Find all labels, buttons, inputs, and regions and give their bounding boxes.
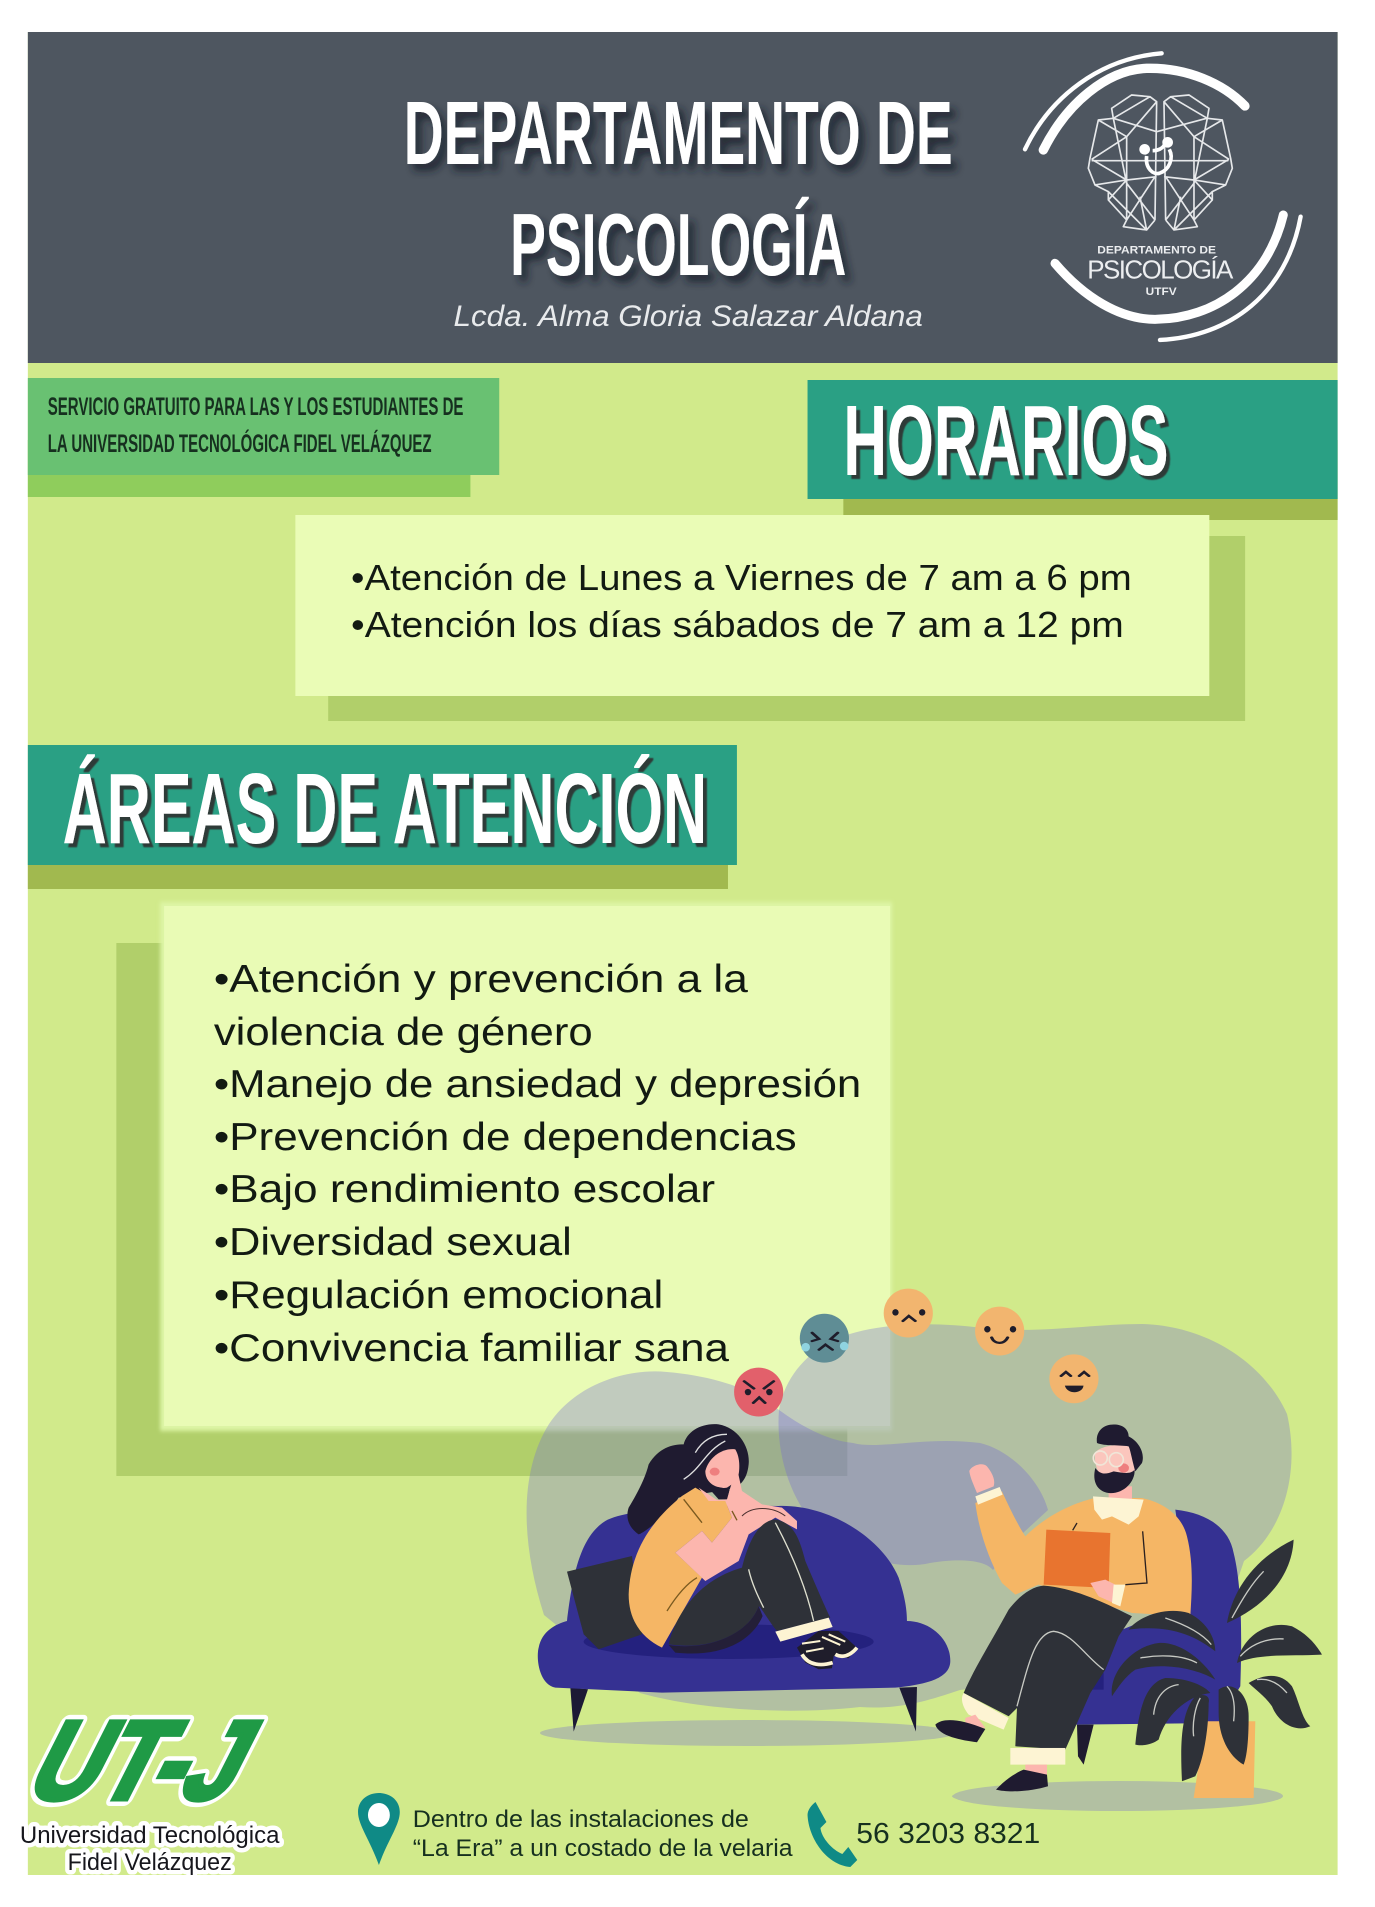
panel: attention areas box: •Manejo de ansiedad y depresión [214,1063,861,1106]
address text: “La Era” a un costado de la velaria [413,1835,793,1862]
panel: attention areas box: •Atención y prevención a la [214,958,748,1001]
logo: Departamento de Psicología: UTFV [1146,286,1178,298]
subtitle: name: Lcda. Alma Gloria Salazar Aldana [453,300,923,333]
logo: university: Fidel Velázquez [68,1849,232,1876]
potted plant leaves [1112,1540,1322,1781]
title [404,84,953,294]
background blob [527,1324,1292,1711]
illustration: therapy session [527,1289,1322,1811]
logo: university: UT-J [9,1699,279,1824]
logo: university: UT-J [9,1699,279,1824]
logo: Departamento de Psicología [1025,53,1301,340]
panel: schedule box: •Atención los días sábados de 7 am a 12 pm [351,605,1124,645]
address text: Dentro de las instalaciones de [413,1806,749,1833]
panel: free service notice: LA UNIVERSIDAD TECNOLÓGICA FIDEL VELÁZQUEZ [48,428,432,458]
logo: Departamento de Psicología: PSICOLOGÍA [1087,254,1234,284]
man on sofa [935,1424,1322,1807]
panel: attention areas box: •Bajo rendimiento escolar [214,1168,715,1211]
panel: attention areas box [116,902,892,1476]
woman on sofa [538,1424,950,1732]
heading: Áreas de atención [28,745,737,889]
title: PSICOLOGÍA [510,196,846,294]
logo: university: Universidad Tecnológica [20,1822,280,1849]
panel: attention areas box: •Prevención de dependencias [214,1116,797,1159]
floor shadows [540,1720,956,1746]
address text [413,1806,793,1862]
phone number: 56 3203 8321 [856,1818,1040,1850]
icon: phone [808,1802,857,1867]
emotion faces [734,1289,1099,1416]
heading: Horarios: HORARIOS [843,386,1169,497]
overlapping purple blob [778,1410,1048,1570]
title: DEPARTAMENTO DE [404,84,953,184]
panel: header band [28,32,1338,363]
panel: attention areas box: •Regulación emocional [214,1274,663,1317]
panel: schedule box: •Atención de Lunes a Viernes de 7 am a 6 pm [351,558,1132,598]
panel: attention areas box: •Convivencia familiar sana [214,1327,729,1370]
panel: schedule box [295,515,1245,721]
logo: Departamento de Psicología: DEPARTAMENTO DE [1097,244,1216,256]
panel: attention areas box: violencia de género [214,1011,593,1054]
panel: free service notice [28,378,499,497]
heading: Áreas de atención: ÁREAS DE ATENCIÓN [63,753,707,865]
panel: free service notice: SERVICIO GRATUITO PARA LAS Y LOS ESTUDIANTES DE [48,393,463,421]
panel: attention areas box: •Diversidad sexual [214,1221,572,1264]
icon: location pin [358,1793,400,1865]
logo: university [9,1699,280,1876]
